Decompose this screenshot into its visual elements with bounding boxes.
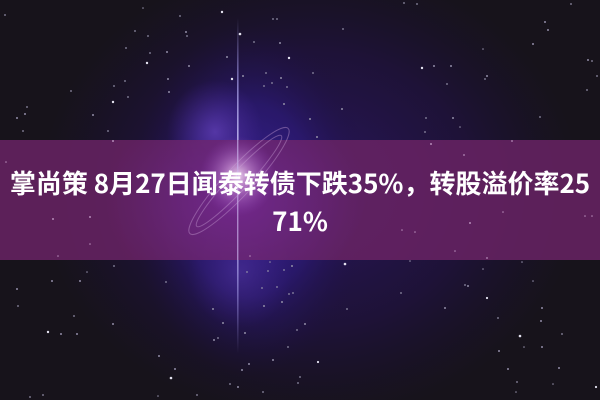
purple halo in band — [132, 140, 333, 260]
translucent purple title band — [0, 140, 600, 260]
stars inside band — [5, 140, 593, 259]
beam across band — [237, 140, 238, 260]
spiral rings — [180, 119, 298, 243]
galaxy core — [200, 136, 276, 216]
title — [10, 164, 590, 238]
galaxy glow and rings over the band — [5, 126, 593, 260]
title: 71% — [272, 202, 328, 238]
title: 掌尚策 8月27日闻泰转债下跌35%，转股溢价率25 — [10, 164, 590, 201]
vertical light beam — [237, 18, 239, 353]
